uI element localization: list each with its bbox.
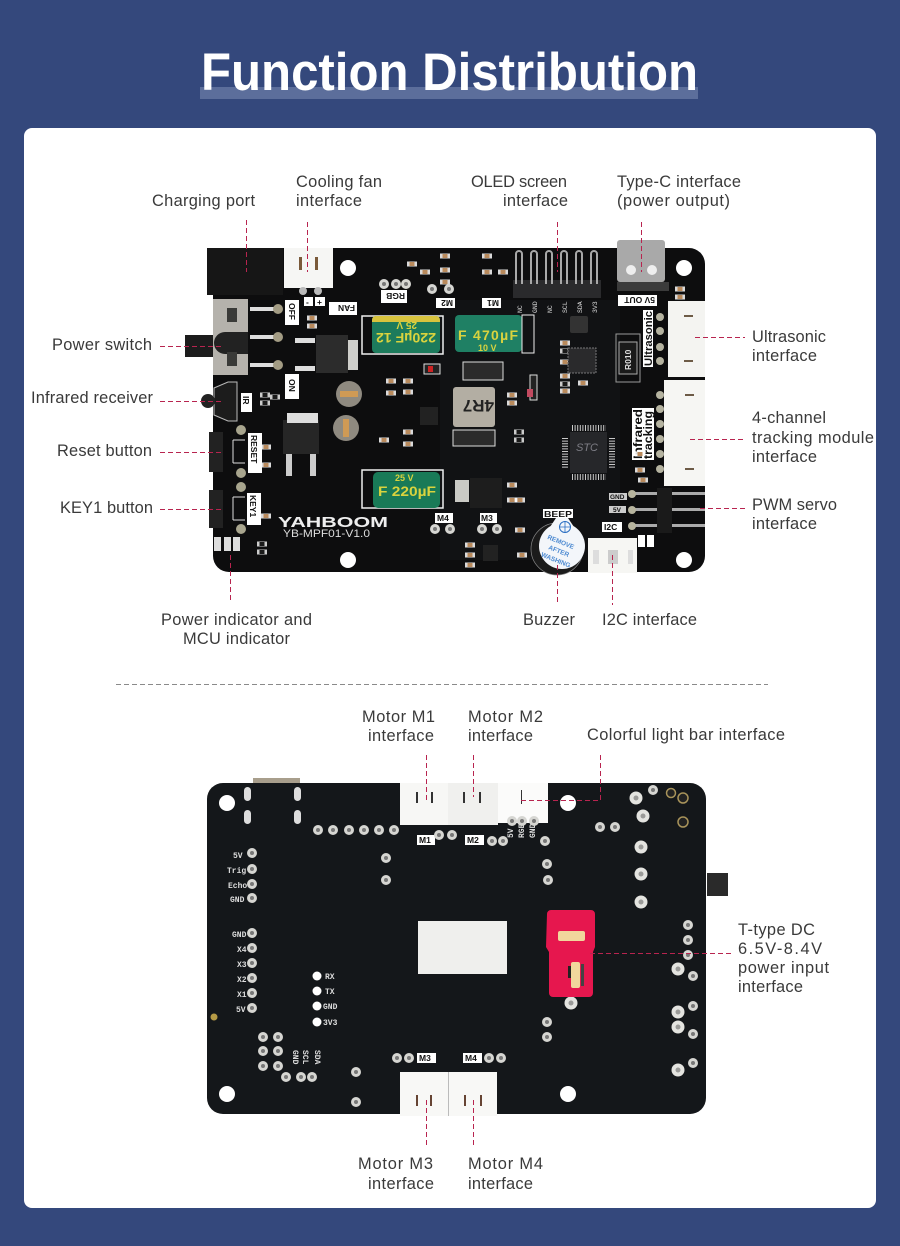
power switch <box>185 299 283 375</box>
OLED header pins: NC <box>547 305 554 313</box>
capacitor 220uF lower <box>362 470 443 508</box>
buzzer <box>531 518 585 575</box>
KEY1 button <box>209 482 246 534</box>
title: Function Distribution <box>201 43 698 102</box>
label: KEY1 button: KEY1 button <box>60 499 153 517</box>
label: T-type DC power input interface <box>738 921 829 996</box>
capacitor 470uF <box>455 315 534 353</box>
silkscreen labels: GND <box>232 931 247 940</box>
silkscreen labels: RGB <box>386 291 405 301</box>
leader line: M2 <box>472 755 474 797</box>
silkscreen labels: 3V3 <box>323 1019 338 1028</box>
label: Ultrasonic interface <box>752 328 826 365</box>
silkscreen labels: 5V OUT <box>623 295 655 305</box>
label: Motor M3 interface: Motor M3 <box>358 1155 433 1173</box>
silkscreen labels: M3 <box>481 513 493 523</box>
silkscreen labels: RESET <box>249 435 259 464</box>
silkscreen labels: Infrared <box>631 409 645 459</box>
leader line: M4 <box>472 1100 474 1147</box>
inductor: 4R7 <box>463 396 494 415</box>
silkscreen labels: OFF <box>287 303 297 320</box>
label: 4-channel tracking module interface: interface <box>752 448 817 466</box>
label: Cooling fan interface: interface <box>296 192 362 210</box>
silkscreen labels: GND <box>323 1003 338 1012</box>
T-type DC connector <box>546 910 595 997</box>
bottom connectors M3 M4 <box>400 1072 497 1116</box>
label: Motor M3 interface <box>358 1155 434 1193</box>
leader line: T-type <box>590 952 731 954</box>
leader line: charging port <box>246 220 248 272</box>
silkscreen labels: tracking <box>641 411 655 459</box>
leader line: tracking <box>690 438 745 440</box>
leader line: KEY1 <box>160 508 222 510</box>
label: Charging port: Charging port <box>152 192 255 210</box>
silkscreen labels: 5V <box>236 1006 246 1015</box>
label: Type-C interface: (power output) <box>617 192 730 210</box>
leader line: buzzer <box>556 565 558 605</box>
leader line: reset <box>160 452 222 454</box>
silkscreen labels <box>227 823 538 1065</box>
label: Cooling fan interface <box>296 173 382 210</box>
leader line: fan <box>306 222 308 272</box>
silkscreen labels: 5V <box>507 828 516 838</box>
label: Infrared receiver: Infrared receiver <box>31 389 154 407</box>
infrared receiver <box>201 382 237 421</box>
label: T-type DC power input interface: power input <box>738 959 829 977</box>
silkscreen labels: TX <box>325 988 335 997</box>
leader line: ultrasonic <box>695 336 745 338</box>
label: OLED screen interface <box>471 173 568 210</box>
silkscreen labels: GND <box>230 896 245 905</box>
silkscreen labels: M2 <box>441 298 453 308</box>
label: Power indicator and MCU indicator: MCU indicator <box>183 630 291 648</box>
label: Motor M1 interface <box>362 708 435 745</box>
transistors <box>283 335 358 476</box>
leader line: IR <box>160 400 222 402</box>
label: Power indicator and MCU indicator: Power indicator and <box>161 611 312 629</box>
label: Cooling fan interface: Cooling fan <box>296 173 382 191</box>
label: Colorful light bar interface: Colorful light bar interface <box>587 726 785 744</box>
silkscreen labels: Ultrasonic <box>643 311 655 366</box>
silkscreen labels: M3 <box>419 1053 431 1063</box>
tracking connector <box>656 380 705 486</box>
label: Motor M1 interface: interface <box>368 727 434 745</box>
small components <box>257 254 685 568</box>
label: Buzzer: Buzzer <box>523 611 576 629</box>
capacitor 470uF: 10 V <box>478 343 497 353</box>
capacitor 220uF lower: F 220µF <box>378 483 436 499</box>
solder joints <box>210 785 698 1107</box>
silkscreen labels: SDA <box>312 1050 321 1065</box>
capacitor 220uF lower: 25 V <box>395 473 414 483</box>
silkscreen labels: I2C <box>604 522 617 532</box>
silkscreen labels: X3 <box>237 961 247 970</box>
label: Motor M2 interface: Motor M2 <box>468 708 543 726</box>
leader line: OLED <box>556 222 558 272</box>
OLED header pins <box>513 251 601 313</box>
divider <box>116 684 768 686</box>
top board: front of PCB <box>185 240 705 575</box>
silkscreen labels: SCL <box>300 1050 309 1065</box>
OLED header pins: 3V3 <box>592 301 599 313</box>
leader line: M1 <box>426 755 428 800</box>
label: 4-channel tracking module interface: tracking module <box>752 429 874 447</box>
buzzer: AFTER <box>547 544 570 559</box>
OLED header pins: SDA <box>577 301 584 313</box>
label: PWM servo interface: PWM servo <box>752 496 837 514</box>
white label patch <box>418 921 507 974</box>
mounting holes <box>340 260 692 568</box>
Yahboom logo: YAHBOOM <box>278 514 388 531</box>
label: Motor M2 interface <box>468 708 543 745</box>
reset button <box>209 425 246 478</box>
silkscreen labels: X1 <box>237 991 247 1000</box>
OLED header pins: NC <box>517 305 524 313</box>
label: Power indicator and MCU indicator <box>161 611 312 648</box>
silkscreen labels: M1 <box>419 835 431 845</box>
label: T-type DC power input interface: interface <box>738 978 803 996</box>
silkscreen labels: RGB <box>518 823 527 838</box>
label: PWM servo interface: interface <box>752 515 817 533</box>
silkscreen labels: GND <box>529 823 538 838</box>
Yahboom logo: YB-MPF01-V1.0 <box>283 528 370 540</box>
label: Motor M1 interface: Motor M1 <box>362 708 435 726</box>
silkscreen labels: GND <box>610 494 625 501</box>
buzzer: REMOVE <box>546 534 576 551</box>
silkscreen labels: 5V <box>613 507 622 514</box>
label: OLED screen interface: OLED screen <box>471 173 567 191</box>
silkscreen labels: X2 <box>237 976 247 985</box>
silkscreen labels: M2 <box>467 835 479 845</box>
silkscreen labels: Echo <box>228 882 247 891</box>
white test pads <box>312 972 322 1026</box>
chips: STC <box>576 442 598 454</box>
label: Type-C interface: Type-C interface <box>617 173 741 191</box>
capacitor 470uF: F 470µF <box>458 327 518 343</box>
chips <box>565 316 612 477</box>
silkscreen labels: M1 <box>487 298 499 308</box>
R010 resistor: R010 <box>623 349 633 370</box>
silkscreen labels: GND <box>290 1050 299 1065</box>
silkscreen labels: 5V <box>233 852 243 861</box>
silkscreen labels: RX <box>325 973 335 982</box>
Type-C interface <box>617 240 669 291</box>
label: T-type DC power input interface: 6.5V-8.4V <box>738 940 822 958</box>
buzzer: WASHING <box>540 552 571 570</box>
leader line: Type-C <box>640 222 642 272</box>
leader line: PWM <box>700 508 745 510</box>
mounting holes <box>219 795 576 1102</box>
capacitor 220uF upper: 25 V <box>396 319 417 330</box>
inductor <box>453 362 503 446</box>
label: 4-channel tracking module interface <box>752 409 874 466</box>
label: OLED screen interface: interface <box>503 192 568 210</box>
label: Motor M4 interface: interface <box>468 1175 533 1193</box>
silkscreen labels: BEEP <box>544 509 572 519</box>
label: Motor M4 interface: Motor M4 <box>468 1155 543 1173</box>
I2C connector <box>588 538 637 573</box>
silkscreen labels: + <box>317 297 322 307</box>
label: Motor M2 interface: interface <box>468 727 533 745</box>
silkscreen labels: KEY1 <box>248 495 258 517</box>
silkscreen labels: FAN <box>338 303 355 313</box>
ultrasonic connector <box>656 301 705 377</box>
silkscreen labels <box>214 290 657 551</box>
crystal pads <box>333 381 362 441</box>
charging port <box>207 248 283 295</box>
Yahboom logo <box>278 514 388 540</box>
label: Type-C interface <box>617 173 741 210</box>
silkscreen labels: Trig <box>227 867 246 876</box>
PWM servo pins <box>628 488 705 533</box>
OLED header pins: GND <box>532 301 539 313</box>
label: Power switch: Power switch <box>52 336 152 354</box>
fan connector <box>284 248 333 295</box>
leader line: I2C <box>612 555 614 605</box>
Type-C stub and slots <box>244 778 301 824</box>
top connectors M1 M2 RGB <box>400 783 548 825</box>
label: 4-channel tracking module interface: 4-channel <box>752 409 826 427</box>
label: Ultrasonic interface: interface <box>752 347 817 365</box>
label: I2C interface: I2C interface <box>602 611 697 629</box>
silkscreen labels: M4 <box>465 1053 477 1063</box>
OLED header pins: SCL <box>562 301 569 313</box>
silkscreen labels: - <box>306 297 309 307</box>
bottom board: back of PCB <box>207 778 728 1116</box>
label: PWM servo interface <box>752 496 837 533</box>
silkscreen labels: IR <box>241 396 251 404</box>
label: T-type DC power input interface: T-type DC <box>738 921 815 939</box>
label: Ultrasonic interface: Ultrasonic <box>752 328 826 346</box>
leader line: switch <box>160 346 222 348</box>
silkscreen labels: X4 <box>237 946 247 955</box>
R010 resistor <box>616 334 640 382</box>
silkscreen labels: M4 <box>437 513 449 523</box>
label: Motor M4 interface <box>468 1155 543 1193</box>
power switch lever <box>707 873 728 896</box>
leader line: M3 <box>426 1100 428 1147</box>
label: Motor M3 interface: interface <box>368 1175 434 1193</box>
capacitor 220uF upper <box>362 316 443 354</box>
silkscreen labels: ON <box>287 379 297 392</box>
leader line: indicator <box>230 555 232 602</box>
leader line: light bar <box>520 755 600 800</box>
capacitor 220uF upper: 220µF 12 <box>376 330 436 346</box>
label: Reset button: Reset button <box>57 442 152 460</box>
